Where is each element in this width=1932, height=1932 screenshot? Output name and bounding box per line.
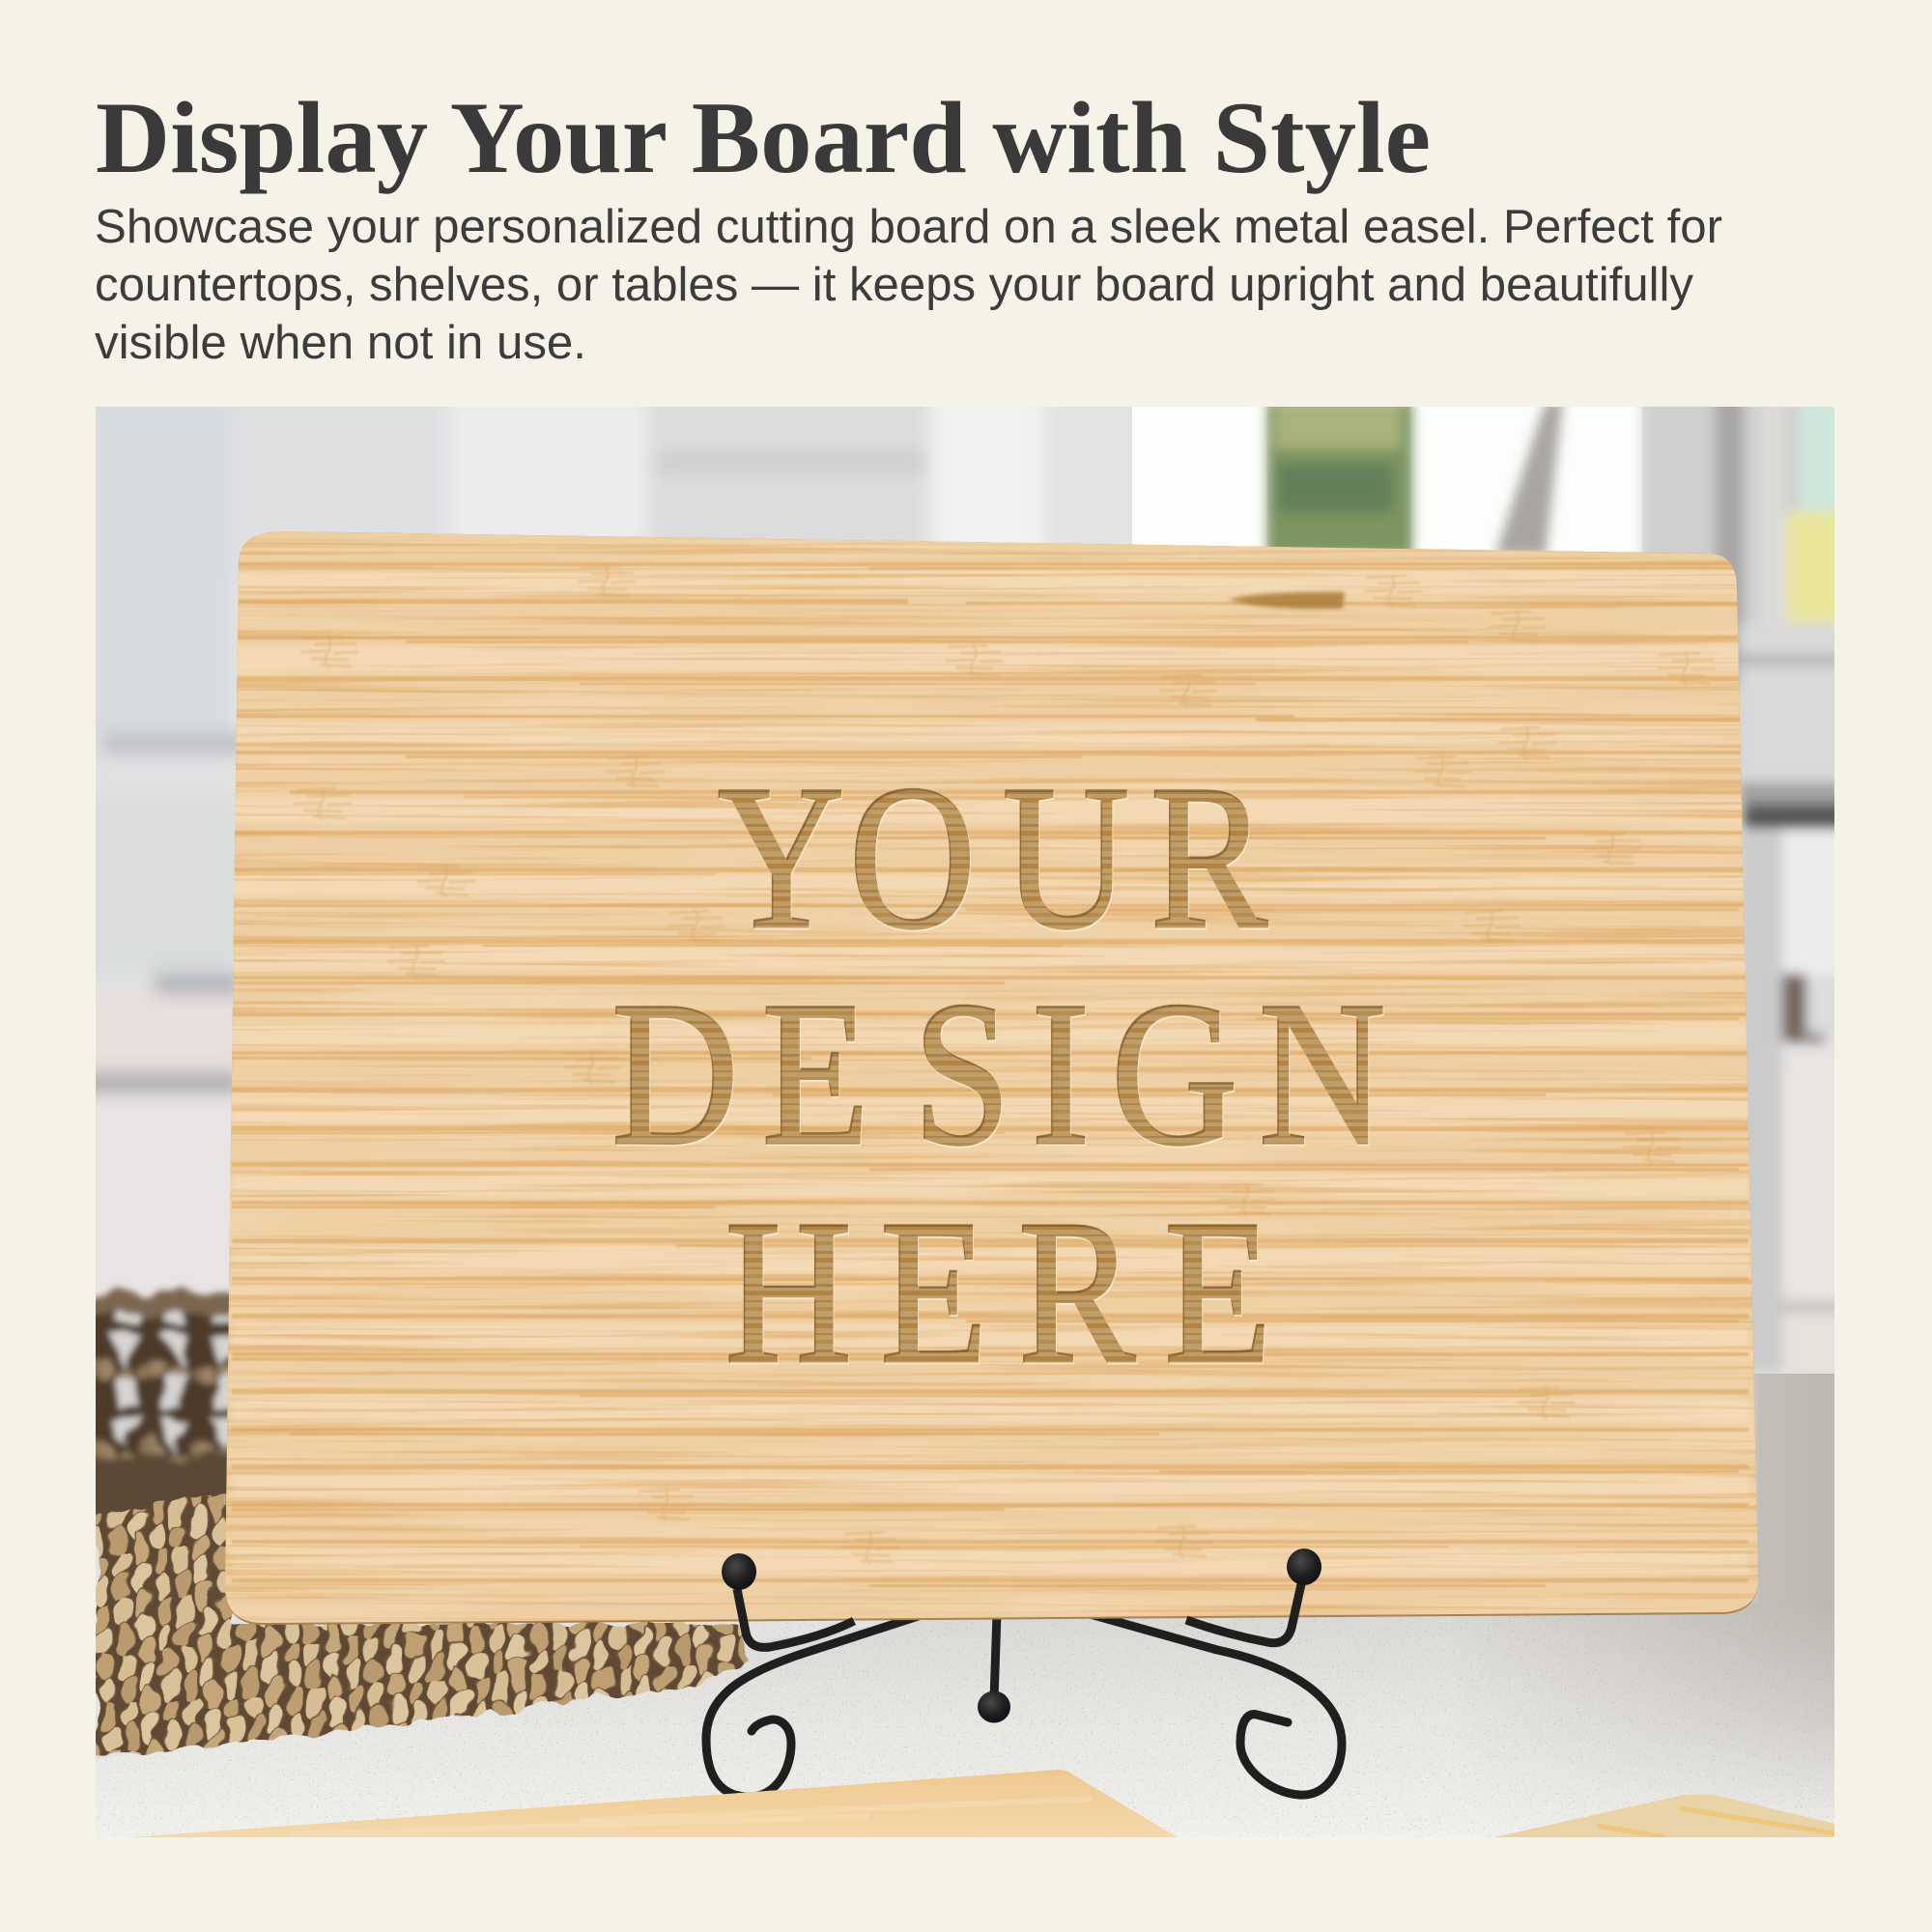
engraved text: YOUR DESIGN HERE: DESIGN — [611, 958, 1385, 1187]
engraved text: YOUR DESIGN HERE: HERE — [725, 1177, 1271, 1406]
title: Display Your Board with Style — [96, 81, 1431, 194]
back basket — [96, 1283, 229, 1516]
pale bands — [232, 570, 1748, 1574]
description text: Showcase your personalized cutting board on a sleek metal easel. Perfect for — [95, 201, 1722, 253]
center leg — [978, 1613, 1010, 1723]
engraved text: YOUR DESIGN HERE: YOUR — [718, 742, 1268, 971]
easel legs and scrolls — [706, 1613, 1342, 1797]
description text — [95, 201, 1722, 369]
left scroll — [706, 1613, 927, 1797]
lower bamboo board — [130, 1770, 1178, 1837]
right scroll — [1087, 1613, 1342, 1795]
description text: visible when not in use. — [95, 317, 586, 369]
easel hooks — [722, 1548, 1321, 1647]
small block bottom right — [1493, 1795, 1835, 1837]
countertop — [96, 1374, 1835, 1837]
rope basket front — [96, 1492, 746, 1760]
description text: countertops, shelves, or tables — it keeps your board upright and beautifully — [95, 259, 1693, 311]
left hook — [722, 1553, 854, 1647]
right hook — [1186, 1548, 1321, 1643]
wood grain lines — [232, 562, 1748, 1587]
wood knot — [1229, 592, 1345, 609]
engraved text: YOUR DESIGN HERE — [615, 788, 1383, 1364]
blurred room background — [77, 386, 1850, 1837]
bamboo node marks — [295, 565, 1715, 1563]
product photo — [77, 386, 1850, 1837]
bamboo cutting board — [217, 526, 1763, 1628]
